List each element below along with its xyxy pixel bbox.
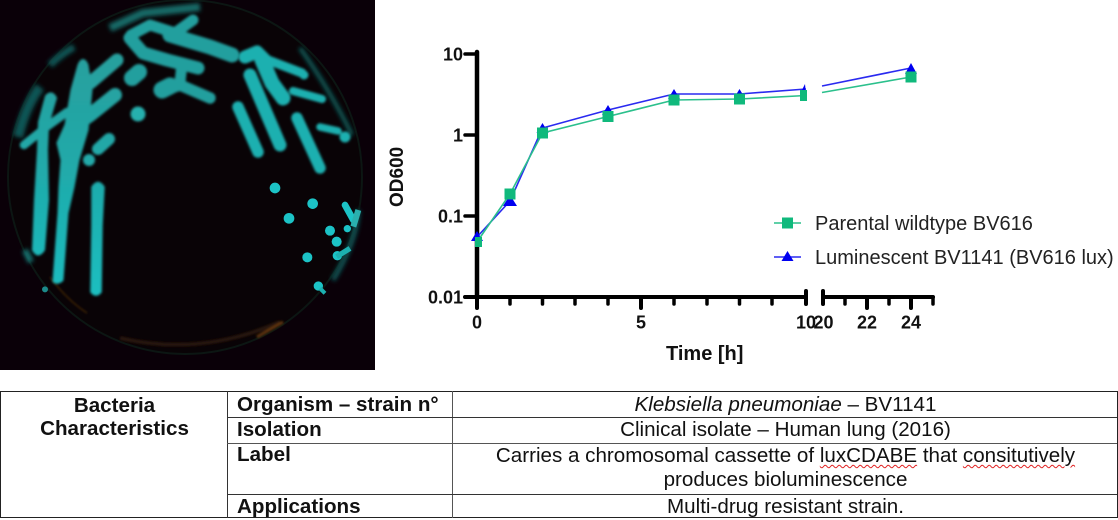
growth curve chart: [387, 44, 1114, 365]
dish rim reflections: [50, 277, 283, 345]
x tick labels: 20: [813, 312, 834, 332]
right colony streaks: [238, 52, 350, 168]
x tick labels: 22: [857, 312, 877, 332]
row value: isolation: Clinical isolate – Human lung (2016): [620, 418, 951, 441]
legend entry: parental wildtype: Parental wildtype BV616: [815, 213, 1033, 235]
row label: label: Label: [237, 443, 291, 466]
isolated bright colonies: [42, 183, 358, 293]
row label: organism: Organism – strain n°: [237, 393, 439, 416]
table heading: Bacteria Characteristics: [40, 394, 189, 440]
legend: [774, 213, 1114, 269]
row value: label: Carries a chromosomal cassette of luxCDABE that consitutively: [496, 444, 1075, 467]
row value: label: produces bioluminescence: [664, 468, 907, 491]
y tick labels: 0.1: [438, 206, 463, 226]
x tick labels: 10: [796, 312, 816, 332]
x tick labels: 5: [636, 312, 646, 332]
y axis with ticks: [465, 52, 477, 297]
y tick labels: 10: [443, 44, 463, 64]
row value: applications: Multi-drug resistant strain.: [667, 495, 904, 518]
left colony streaks: [24, 60, 117, 295]
x axis right segment: [823, 291, 933, 308]
x tick labels: [472, 312, 921, 332]
row label: isolation: Isolation: [237, 418, 322, 441]
row value: organism: Klebsiella pneumoniae – BV1141: [635, 393, 936, 416]
y tick labels: [428, 44, 463, 308]
series: parental wildtype BV616: [475, 72, 916, 247]
series: luminescent BV1141: [471, 63, 917, 241]
table heading: Bacteria Characteristics: Characteristics: [40, 417, 189, 440]
x axis title: Time [h]: [666, 343, 743, 365]
x tick labels: 0: [472, 312, 482, 332]
y axis title: OD600: [387, 147, 408, 207]
y tick labels: 0.01: [428, 288, 463, 308]
photo: luminescent bacteria on petri dish: [0, 0, 375, 370]
row label: applications: Applications: [237, 495, 361, 518]
x tick labels: 24: [901, 312, 921, 332]
x axis left segment: [465, 291, 806, 308]
row value: label: [496, 444, 1076, 491]
table: bacteria characteristics: [0, 391, 1118, 518]
legend entry: luminescent: Luminescent BV1141 (BV616 lux): [815, 247, 1114, 269]
top colony cluster: [130, 20, 232, 122]
y tick labels: 1: [453, 126, 463, 146]
table heading: Bacteria Characteristics: Bacteria: [74, 394, 155, 417]
